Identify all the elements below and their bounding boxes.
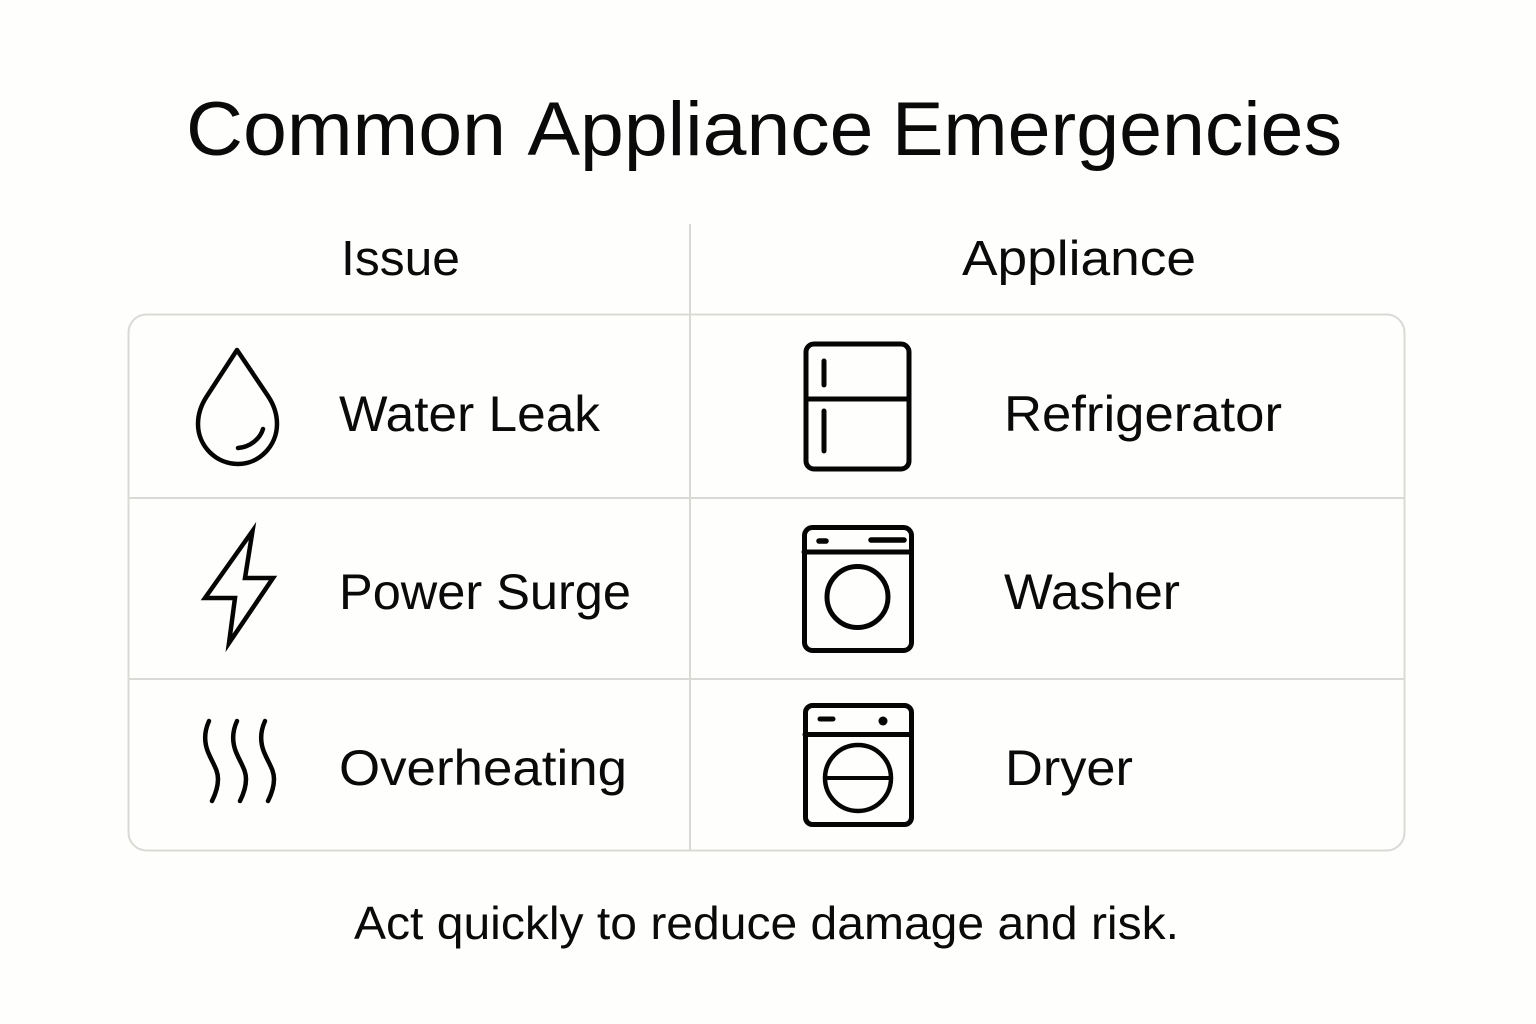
label: Power Surge: Power Surge (339, 564, 631, 620)
title: Common (186, 87, 506, 172)
icon: heat waves (205, 721, 274, 801)
title: Appliance (528, 87, 874, 172)
label: Water Leak: Water Leak (339, 386, 601, 442)
label: Refrigerator: Refrigerator (1004, 386, 1282, 442)
title (186, 87, 1342, 172)
column header: Appliance: Appliance (962, 232, 1196, 286)
icon: lightning bolt (205, 531, 273, 643)
icon: refrigerator (806, 344, 909, 469)
label: Dryer: Dryer (1005, 740, 1133, 796)
icon: dryer (805, 706, 912, 824)
label: Washer: Washer (1004, 564, 1180, 620)
column header: Issue: Issue (341, 232, 460, 286)
icon: water drop (198, 350, 277, 464)
footer note: Act quickly to reduce damage and risk. (354, 897, 1179, 949)
table (128, 224, 1404, 850)
icon: washer (804, 528, 912, 650)
label: Overheating: Overheating (339, 740, 627, 796)
title: Emergencies (892, 87, 1342, 172)
